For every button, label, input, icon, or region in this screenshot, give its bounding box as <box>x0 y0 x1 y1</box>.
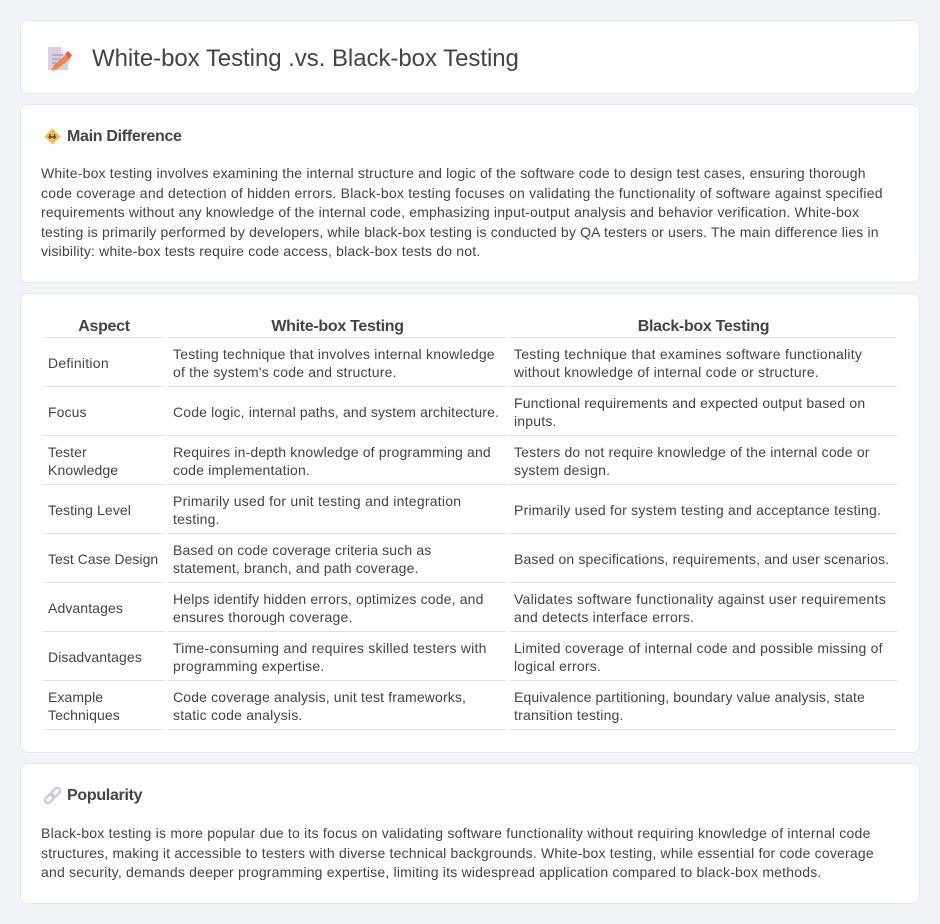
row: tester knowledge: Requires in-depth knowledge of programming and <box>173 444 491 460</box>
row: example techniques: Equivalence partitioning, boundary value analysis, state <box>514 689 865 705</box>
text block: main difference <box>41 165 883 259</box>
row: testing level: Testing Level <box>48 502 131 518</box>
table header: Aspect <box>78 318 130 335</box>
table header: Black-box Testing <box>638 318 769 335</box>
row: definition: Testing technique that examines software functionality <box>514 346 862 362</box>
row: advantages <box>43 591 897 632</box>
row: focus <box>43 395 897 436</box>
row: testing level <box>43 493 897 534</box>
row: test case design <box>43 542 897 583</box>
text block: popularity: Black-box testing is more popular due to its focus on validating software functionality without requiring knowledge of internal code <box>41 825 871 841</box>
table header: White-box Testing <box>271 318 404 335</box>
text block: popularity: and security, demands deeper programming expertise, limiting its widespread application compared to black-box methods. <box>41 864 822 880</box>
heading: popularity: Popularity <box>67 787 142 804</box>
text block: popularity: structures, making it accessible to testers with diverse technical backgrounds. White-box testing, while essential for code coverage <box>41 845 874 861</box>
row: focus: Focus <box>48 404 87 420</box>
row: definition: Definition <box>48 355 109 371</box>
text block: popularity <box>41 825 874 880</box>
row: test case design: statement, branch, and path coverage. <box>173 560 419 576</box>
text block: main difference: visibility: white-box tests require code access, black-box tests do not. <box>41 243 480 259</box>
row: disadvantages <box>43 640 897 681</box>
row: definition: of the system's code and structure. <box>173 364 397 380</box>
row: test case design: Based on code coverage criteria such as <box>173 542 431 558</box>
row: tester knowledge <box>43 444 897 485</box>
icon: warning diamond <box>44 128 60 144</box>
row: advantages: Advantages <box>48 600 123 616</box>
row: advantages: Validates software functionality against user requirements <box>514 591 886 607</box>
text block: main difference: White-box testing involves examining the internal structure and logic of the software code to design test cases, ensuring thorough <box>41 165 866 181</box>
text block: main difference: code coverage and detection of hidden errors. Black-box testing focuses on validating the functionality of software against specified <box>41 185 883 201</box>
row: focus: inputs. <box>514 413 557 429</box>
row: tester knowledge: Knowledge <box>48 462 118 478</box>
row: testing level: Primarily used for unit testing and integration <box>173 493 461 509</box>
row: advantages: ensures thorough coverage. <box>173 609 353 625</box>
row: example techniques: static code analysis. <box>173 707 302 723</box>
row: disadvantages: logical errors. <box>514 658 601 674</box>
row: disadvantages: Disadvantages <box>48 649 142 665</box>
panel: popularity <box>20 763 920 904</box>
row: example techniques: Example <box>48 689 103 705</box>
row: disadvantages: Time-consuming and requires skilled testers with <box>173 640 487 656</box>
row: testing level: testing. <box>173 511 220 527</box>
title: White-box Testing .vs. Black-box Testing <box>92 45 519 72</box>
row: advantages: Helps identify hidden errors, optimizes code, and <box>173 591 484 607</box>
row: example techniques: Code coverage analysis, unit test frameworks, <box>173 689 466 705</box>
row: advantages: and detects interface errors. <box>514 609 694 625</box>
heading: main difference: Main Difference <box>67 128 182 145</box>
text block: main difference: requirements without any knowledge of the internal code, emphasizing input-output analysis and behavior verification. White-box <box>41 204 859 220</box>
row: disadvantages: Limited coverage of internal code and possible missing of <box>514 640 883 656</box>
row: testing level: Primarily used for system testing and acceptance testing. <box>514 502 881 518</box>
row: example techniques: transition testing. <box>514 707 624 723</box>
row: example techniques <box>43 689 897 730</box>
row: tester knowledge: system design. <box>514 462 610 478</box>
row: disadvantages: programming expertise. <box>173 658 324 674</box>
row: tester knowledge: Tester <box>48 444 87 460</box>
row: definition <box>43 346 897 387</box>
row: focus: Code logic, internal paths, and system architecture. <box>173 404 499 420</box>
row: tester knowledge: code implementation. <box>173 462 310 478</box>
row: definition: Testing technique that involves internal knowledge <box>173 346 495 362</box>
table header <box>43 318 897 338</box>
row: test case design: Based on specifications, requirements, and user scenarios. <box>514 551 889 567</box>
row: example techniques: Techniques <box>48 707 120 723</box>
text block: main difference: testing is primarily performed by developers, while black-box testing is conducted by QA testers or users. The main difference lies in <box>41 224 879 240</box>
panel: title card <box>20 20 920 94</box>
panel: main difference <box>20 104 920 283</box>
row: definition: without knowledge of internal code or structure. <box>514 364 819 380</box>
panel: comparison table <box>20 293 920 753</box>
icon: chain link <box>44 787 61 804</box>
row: tester knowledge: Testers do not require knowledge of the internal code or <box>514 444 870 460</box>
icon: document with pencil <box>48 47 72 71</box>
row: test case design: Test Case Design <box>48 551 158 567</box>
row: focus: Functional requirements and expected output based on <box>514 395 865 411</box>
